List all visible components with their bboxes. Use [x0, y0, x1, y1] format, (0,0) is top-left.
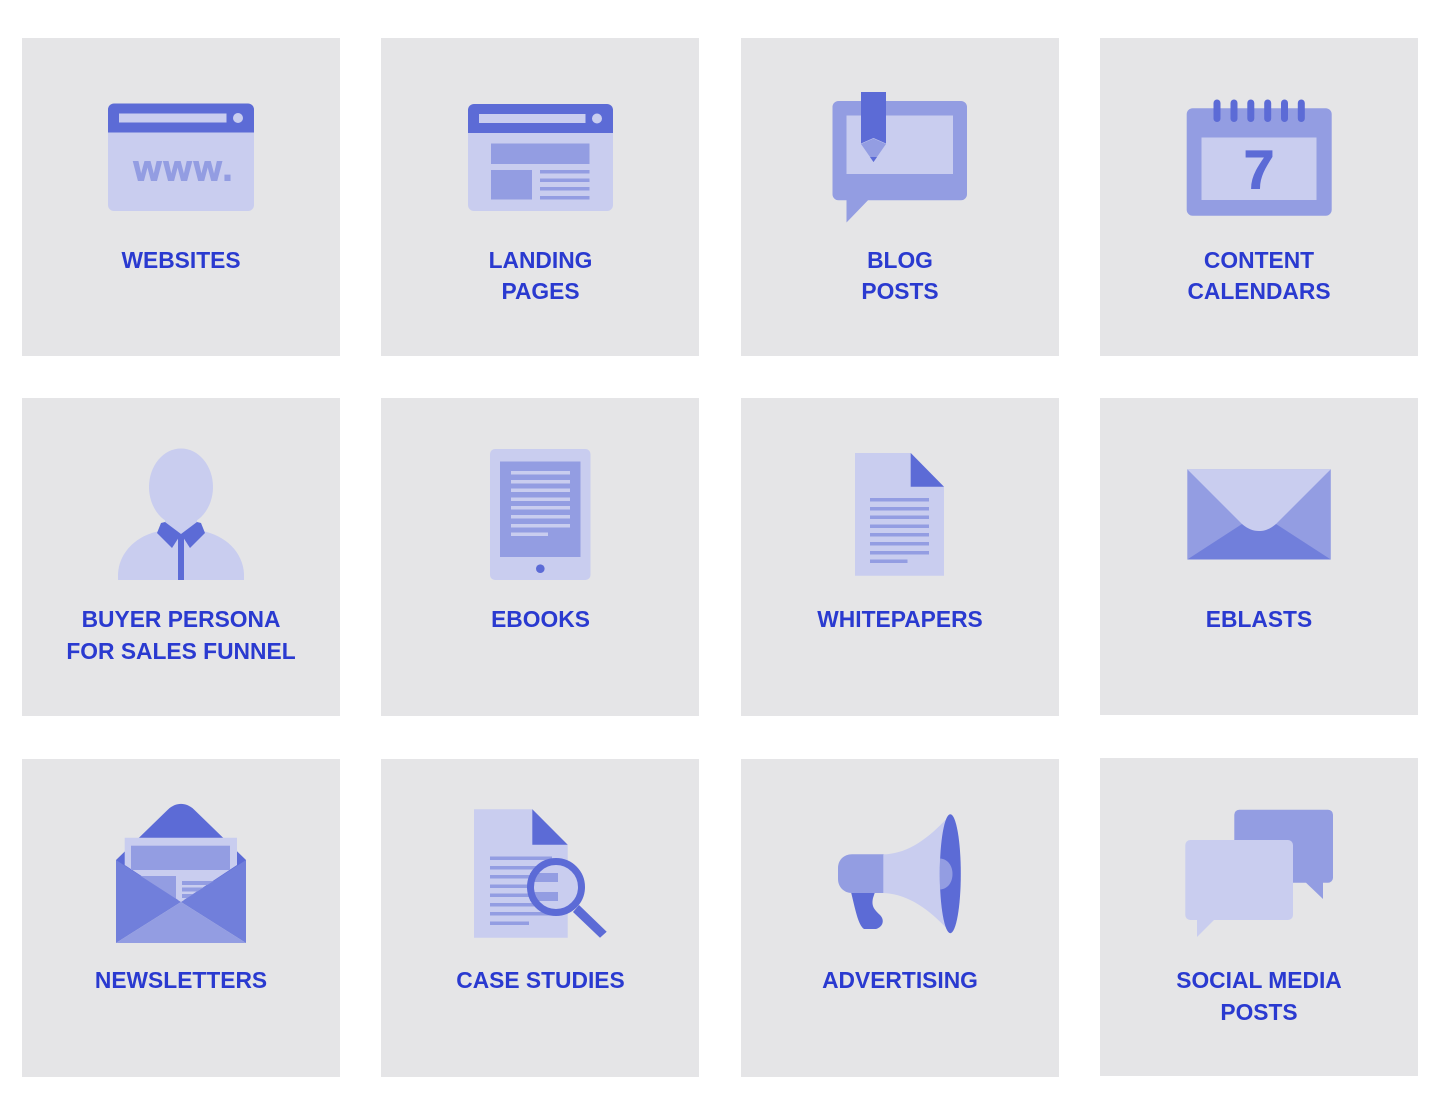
label: buyer persona for sales funnel: FOR SALES FUNNEL — [66, 638, 296, 664]
label: landing pages: LANDING — [489, 247, 592, 273]
icon: calendar: 7 — [1244, 138, 1274, 200]
label: social media posts: POSTS — [1220, 999, 1298, 1025]
icon: megaphone — [838, 814, 961, 933]
label: websites: WEBSITES — [121, 247, 241, 273]
panel: content calendars — [1100, 38, 1418, 356]
icon: person — [118, 448, 244, 580]
label: newsletters: NEWSLETTERS — [95, 967, 267, 993]
label: content calendars: CONTENT — [1204, 247, 1314, 273]
label: social media posts: SOCIAL MEDIA — [1176, 967, 1342, 993]
panel: social media posts — [1100, 758, 1418, 1076]
panel: ebooks — [381, 398, 699, 716]
label: blog posts: BLOG — [867, 247, 933, 273]
icon: browser window with www — [108, 104, 254, 211]
icon: document with magnifier — [474, 809, 607, 938]
panel: advertising — [741, 759, 1059, 1077]
panel: eblasts — [1100, 398, 1418, 715]
panel: landing pages — [381, 38, 699, 356]
icon: closed envelope — [1187, 469, 1331, 560]
panel: case studies — [381, 759, 699, 1077]
label: landing pages: PAGES — [501, 278, 580, 304]
icon: calendar — [1187, 100, 1332, 216]
label: whitepapers: WHITEPAPERS — [817, 606, 983, 632]
icon: chat bubbles — [1185, 810, 1333, 937]
panel: websites — [22, 38, 340, 356]
icon: document — [855, 453, 944, 576]
label: content calendars: CALENDARS — [1187, 278, 1331, 304]
panel: blog posts — [741, 38, 1059, 356]
icon: open envelope with newsletter — [116, 804, 246, 943]
label: ebooks: EBOOKS — [491, 606, 590, 632]
label: buyer persona for sales funnel: BUYER PERSONA — [82, 606, 280, 632]
panel: whitepapers — [741, 398, 1059, 716]
panel: newsletters — [22, 759, 340, 1077]
icon: browser window with www: www. — [132, 148, 232, 188]
icon: speech bubble with pencil — [832, 92, 967, 222]
label: case studies: CASE STUDIES — [456, 967, 625, 993]
icon: e-reader — [490, 449, 590, 580]
label: eblasts: EBLASTS — [1206, 606, 1312, 632]
panel: buyer persona — [22, 398, 340, 716]
icon: landing page layout — [468, 104, 613, 211]
label: blog posts: POSTS — [861, 278, 939, 304]
label: advertising: ADVERTISING — [822, 967, 978, 993]
